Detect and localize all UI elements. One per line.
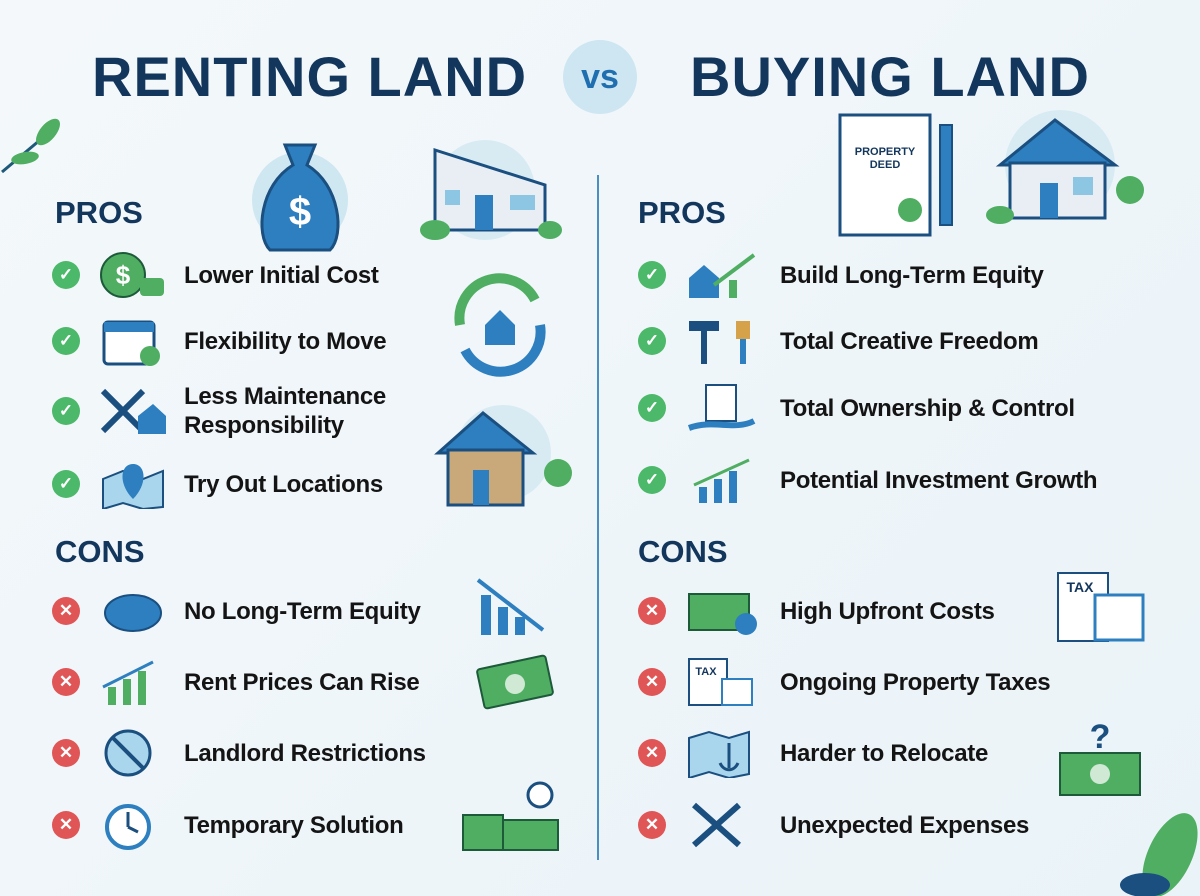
item: investment: ✓ xyxy=(645,470,659,489)
panel: buying cons list xyxy=(638,593,1050,848)
item: no equity: No Long-Term Equity xyxy=(184,598,421,624)
vs badge: vs xyxy=(581,58,619,96)
panel: renting cons list xyxy=(52,594,426,850)
item: ownership: ✓ xyxy=(645,398,659,417)
icon: deed: PROPERTY xyxy=(855,146,916,158)
item: no equity: ✕ xyxy=(59,601,73,620)
vs badge xyxy=(563,40,637,114)
item: lower initial cost: $ xyxy=(116,260,131,290)
item: upfront xyxy=(638,593,995,635)
item: rent rise: Rent Prices Can Rise xyxy=(184,668,419,696)
heading: buying cons: CONS xyxy=(638,534,728,569)
item: temporary xyxy=(52,804,404,850)
item: unexpected xyxy=(638,802,1029,848)
item: ownership xyxy=(638,384,1075,431)
item: less maintenance xyxy=(52,383,386,439)
heading: renting pros: PROS xyxy=(55,195,143,230)
title: renting land: RENTING LAND xyxy=(92,45,527,108)
item: equity xyxy=(638,253,1044,298)
icon: tax calendar: TAX xyxy=(1067,579,1094,595)
icon: money bag: $ xyxy=(289,190,311,234)
item: creative freedom: Total Creative Freedom xyxy=(780,328,1038,354)
item: temporary: Temporary Solution xyxy=(184,812,404,838)
item: flexibility: Flexibility to Move xyxy=(184,328,386,354)
icon: deed: DEED xyxy=(870,159,900,171)
icon: question cash: ? xyxy=(1090,718,1110,756)
item: landlord: Landlord Restrictions xyxy=(184,740,426,766)
icon: question cash xyxy=(1059,718,1141,796)
icon: leaf bottom right xyxy=(1120,813,1198,896)
item: rent rise: ✕ xyxy=(59,672,73,691)
item: unexpected: Unexpected Expenses xyxy=(780,812,1029,838)
divider xyxy=(597,175,599,860)
item: lower initial cost xyxy=(52,252,379,298)
icon: tax calendar xyxy=(1057,572,1144,642)
item: try locations: ✓ xyxy=(59,474,73,493)
title: buying land: BUYING LAND xyxy=(690,45,1090,108)
item: try locations xyxy=(52,464,383,509)
icon: leaf xyxy=(1,118,60,174)
item: upfront: High Upfront Costs xyxy=(780,598,995,624)
item: flexibility xyxy=(52,320,386,366)
item: lower initial cost: Lower Initial Cost xyxy=(184,262,379,288)
item: less maintenance: ✓ xyxy=(59,401,73,420)
item: relocate xyxy=(638,730,988,778)
item: lower initial cost: ✓ xyxy=(59,265,73,284)
item: flexibility: ✓ xyxy=(59,331,73,350)
item: taxes xyxy=(638,658,1050,706)
item: no equity xyxy=(52,594,421,632)
item: landlord: ✕ xyxy=(59,743,73,762)
item: taxes: TAX xyxy=(695,666,717,678)
item: creative freedom xyxy=(638,321,1038,364)
item: equity: ✓ xyxy=(645,265,659,284)
item: investment: Potential Investment Growth xyxy=(780,466,1097,494)
item: ownership: Total Ownership & Control xyxy=(780,394,1075,422)
heading: renting cons: CONS xyxy=(55,534,145,569)
item: equity: Build Long-Term Equity xyxy=(780,262,1044,288)
panel: buying pros list xyxy=(638,253,1097,503)
icon: cycle arrows house xyxy=(454,273,546,377)
icon: house right xyxy=(986,110,1144,224)
icon: cash xyxy=(476,654,554,710)
item: investment xyxy=(638,458,1097,503)
icon: boxes xyxy=(462,782,559,851)
item: try locations: Try Out Locations xyxy=(184,470,383,498)
heading: buying pros: PROS xyxy=(638,195,726,230)
item: landlord xyxy=(52,730,426,776)
icon: deed xyxy=(838,114,953,236)
item: less maintenance: Responsibility xyxy=(184,412,344,439)
icon: modern house xyxy=(420,140,562,240)
icon: cabin xyxy=(434,405,572,506)
item: less maintenance: Less Maintenance xyxy=(184,383,386,410)
item: relocate: Harder to Relocate xyxy=(780,740,988,766)
item: relocate: ✕ xyxy=(645,743,659,762)
item: temporary: ✕ xyxy=(59,815,73,834)
panel: renting pros list xyxy=(52,252,386,509)
item: taxes: ✕ xyxy=(645,672,659,691)
item: unexpected: ✕ xyxy=(645,815,659,834)
icon: money bag xyxy=(252,144,348,252)
icon: down chart xyxy=(476,578,544,635)
item: creative freedom: ✓ xyxy=(645,331,659,350)
item: rent rise xyxy=(52,660,419,705)
item: taxes: Ongoing Property Taxes xyxy=(780,668,1050,696)
item: upfront: ✕ xyxy=(645,601,659,620)
